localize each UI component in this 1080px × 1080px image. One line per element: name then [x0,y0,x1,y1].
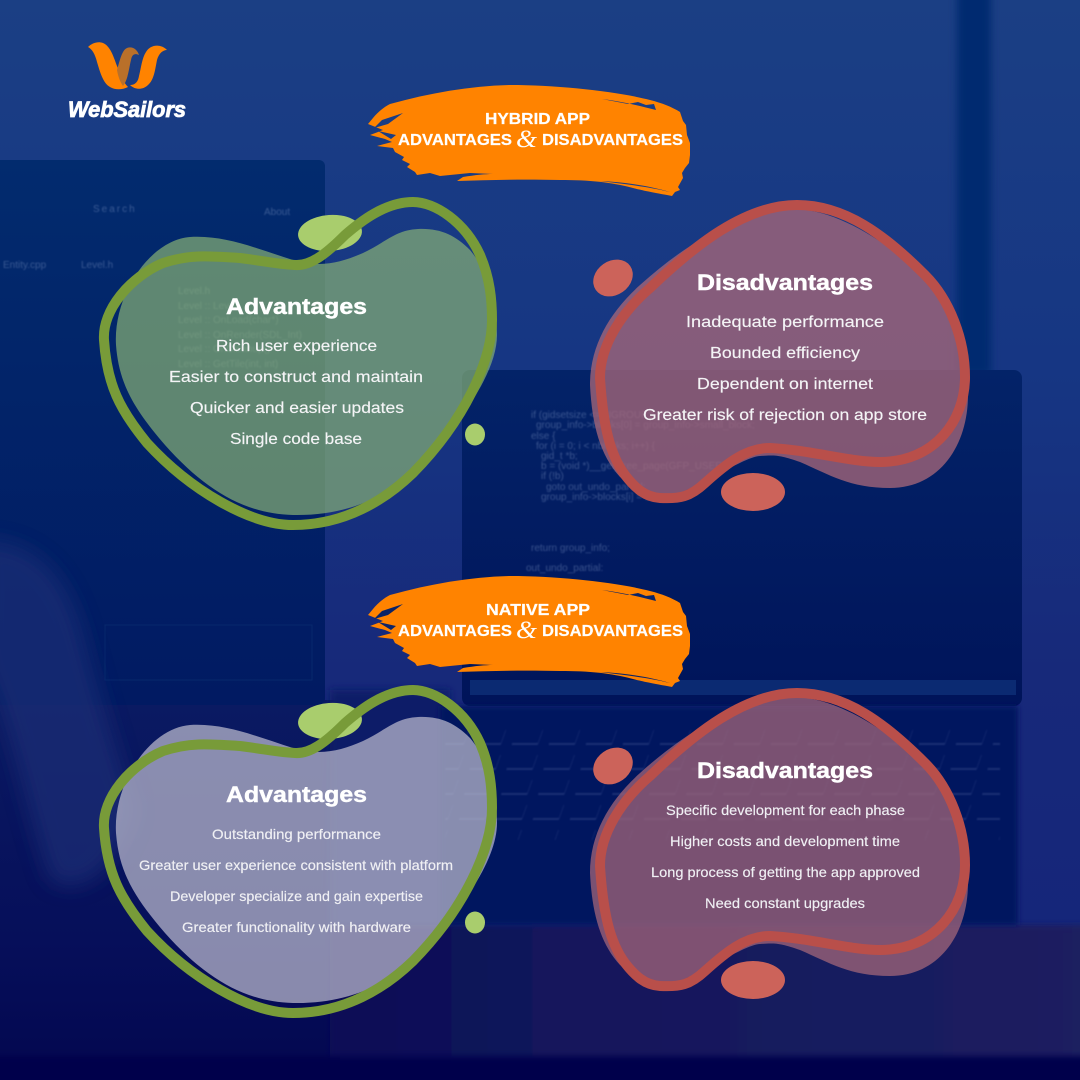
blurred screen text in background: About [264,207,290,218]
list item: Need constant upgrades [705,895,865,911]
panel: native disadvantages [586,693,968,999]
blurred screen text in background: Level :: OnRender(SDL_Int) [178,330,302,341]
blurred screen text in background: group_info->blocks[i] = b; [541,492,653,503]
blurred screen text in background: Entity.cpp [3,260,47,271]
heading: Advantages [226,294,367,319]
banner: hybrid app heading [368,85,690,196]
blurred screen text in background: Level :: OnLoad(char*) [178,315,279,326]
panel: hybrid advantages [104,202,497,525]
banner subtitle end: DISADVANTAGES [542,623,683,640]
list item: Bounded efficiency [710,345,860,362]
banner subtitle end: DISADVANTAGES [542,132,683,149]
list item: Specific development for each phase [666,802,905,818]
blurred screen text in background: goto out_undo_partial; [546,482,646,493]
blurred screen text in background: Level :: Level [178,301,237,312]
banner subtitle: ADVANTAGES [398,132,512,149]
decorative ellipse: red bottom [721,961,785,999]
list item: Dependent on internet [697,376,874,393]
heading: Disadvantages [697,270,873,295]
list item: Greater risk of rejection on app store [643,407,927,424]
blurred screen text in background: return group_info; [531,543,610,554]
decorative dot [465,424,485,446]
blurred screen text in background: b = (void *)__get_free_page(GFP_USER); [541,461,729,472]
list item: Inadequate performance [686,314,884,331]
brush stroke [368,576,690,687]
decorative ellipse: green [297,213,363,253]
blurred screen text in background: Level.h [81,260,113,271]
decorative dot [465,912,485,934]
banner subtitle: ADVANTAGES [398,623,512,640]
decorative ellipse: red bottom [721,473,785,511]
decorative ellipse: green [297,701,363,741]
list item: Easier to construct and maintain [169,369,423,386]
blob outline [600,693,965,986]
blob fill [116,229,497,515]
list item: Rich user experience [216,338,377,355]
blurred screen text in background: if (gidsetsize <= NGROUPS_SMALL) [531,410,696,421]
icon: orange sails [88,42,167,89]
logo: WebSailors [68,42,186,122]
list item: Single code base [230,431,362,448]
script ampersand: & [516,617,538,644]
list item: Greater user experience consistent with platform [139,857,453,873]
blurred screen text in background: Level.h [178,286,210,297]
blurred screen text in background: out_undo_partial: [526,563,603,574]
blurred screen text in background: else { [531,431,556,442]
list item: Greater functionality with hardware [182,919,411,935]
blob outline [104,202,492,525]
brush stroke [368,85,690,196]
banner title: HYBRID APP [485,111,590,128]
blurred screen text in background: for (i = 0; i < nblocks; i++) { [536,441,656,452]
blurred screen text in background: group_info->blocks[0] = group_info->small_block; [536,420,755,431]
decorative ellipse: red [586,252,640,304]
script ampersand: & [516,126,538,153]
blurred screen text in background: Search [93,204,137,215]
blurred screen text in background: Level :: GetTile(int, int) [178,359,278,370]
blob fill [590,697,968,982]
heading: Advantages [226,782,367,807]
list item: Higher costs and development time [670,833,900,849]
heading: Disadvantages [697,758,873,783]
logo wordmark: WebSailors [68,97,186,122]
banner title: NATIVE APP [486,602,590,619]
blob outline [600,205,965,498]
decorative ellipse: red [586,740,640,792]
list item: Outstanding performance [212,826,381,842]
list item: Quicker and easier updates [190,400,404,417]
panel: hybrid disadvantages [586,205,968,511]
banner: native app heading [368,576,690,687]
blurred screen text in background [3,204,755,574]
blob fill [116,717,497,1003]
list item: Long process of getting the app approved [651,864,920,880]
blurred screen text in background: Level :: OnCleanup() [178,344,270,355]
blob outline [104,690,492,1013]
blurred screen text in background: gid_t *b; [541,451,578,462]
blurred screen text in background: if (!b) [541,471,564,482]
blob fill [590,209,968,494]
list item: Developer specialize and gain expertise [170,888,423,904]
panel: native advantages [104,690,497,1013]
